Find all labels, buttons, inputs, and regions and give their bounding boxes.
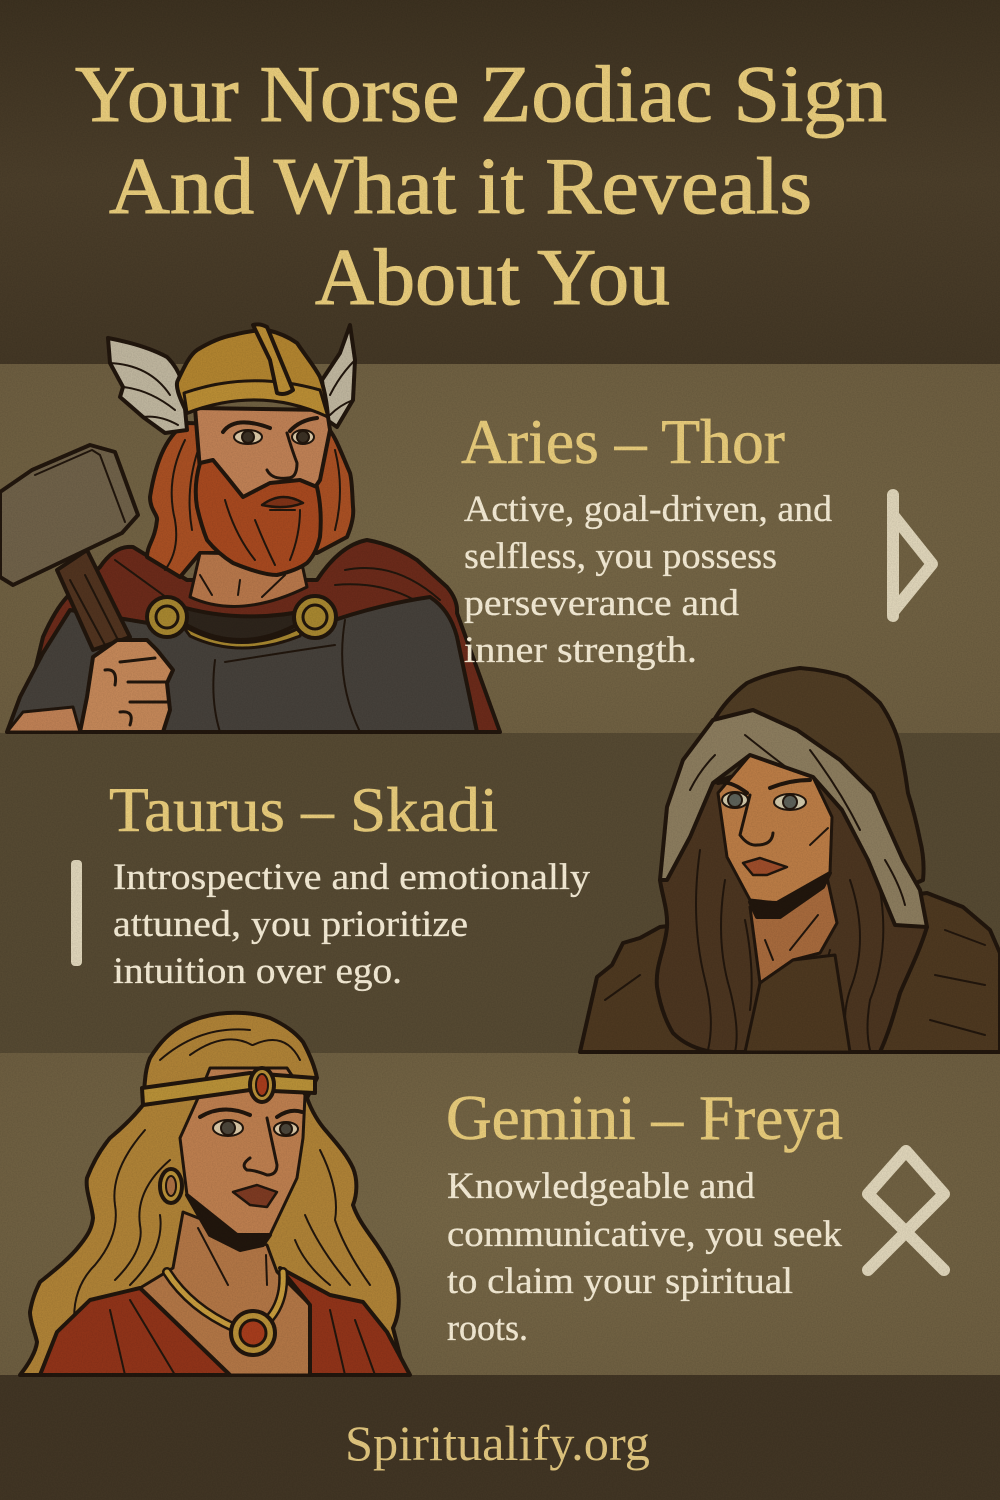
icon: Othala rune <box>868 1151 944 1270</box>
band: Taurus background <box>0 733 1000 1053</box>
Skadi hair <box>657 760 927 1052</box>
Thor beard <box>196 460 321 575</box>
text: Taurus description: attuned, you prioritize <box>113 904 468 945</box>
header band <box>0 0 1000 364</box>
illustration: Freya <box>20 1013 410 1375</box>
Thor helmet dome <box>177 330 328 417</box>
Freya skin chest <box>140 1212 310 1375</box>
Freya nose <box>244 1118 277 1175</box>
heading: Taurus: Taurus – Skadi <box>109 774 498 845</box>
Thor left wing <box>108 338 187 433</box>
Thor torso <box>7 597 477 732</box>
title: About You <box>315 234 670 322</box>
Thor brooch right <box>294 596 336 638</box>
Skadi fur trim <box>660 710 927 927</box>
Thor eyes <box>234 430 314 444</box>
title <box>75 51 887 322</box>
Thor nose <box>267 433 297 478</box>
band: Gemini background <box>0 1053 1000 1375</box>
Skadi nose <box>740 795 773 845</box>
Freya mouth <box>233 1185 277 1207</box>
title: And What it Reveals <box>109 143 812 231</box>
Freya brows <box>200 1109 302 1117</box>
icon: Thurisaz rune <box>893 495 932 616</box>
Skadi brows <box>718 780 810 793</box>
Skadi collar fur <box>745 955 850 1052</box>
Thor hair <box>147 423 353 577</box>
text: Aries description: selfless, you possess <box>464 536 777 577</box>
Skadi fur cloak <box>580 893 1000 1052</box>
text: Taurus description: intuition over ego. <box>113 951 402 992</box>
Skadi eyes <box>722 792 806 810</box>
Freya headband <box>142 1073 315 1105</box>
Thor neck <box>190 553 307 606</box>
footer band <box>0 1375 1000 1500</box>
Skadi neck <box>750 877 837 983</box>
icon: Isa rune <box>71 860 82 966</box>
text: Taurus description: Introspective and emotionally <box>113 857 591 898</box>
text: Aries description: inner strength. <box>464 630 697 671</box>
Thor forearm <box>7 707 80 732</box>
illustration: Thor <box>0 324 500 732</box>
Thor helmet ridge <box>253 324 293 394</box>
heading: Aries: Aries – Thor <box>461 406 785 477</box>
text: Gemini description: roots. <box>447 1308 528 1349</box>
Freya dress <box>40 1268 410 1375</box>
Thor hammer head <box>0 445 138 585</box>
Freya hair <box>20 1013 405 1375</box>
Thor cape <box>20 540 500 732</box>
Thor hammer handle <box>57 550 130 650</box>
Freya headband jewel <box>250 1068 274 1102</box>
Thor fist <box>80 640 173 732</box>
text: Gemini description <box>447 1166 843 1349</box>
text: Aries description <box>464 489 833 671</box>
Freya necklace <box>167 1272 283 1328</box>
Skadi face <box>718 755 832 903</box>
Thor face <box>195 408 330 510</box>
Thor right wing <box>322 325 355 427</box>
Thor collar <box>175 605 310 640</box>
title: Your Norse Zodiac Sign <box>75 51 887 139</box>
Freya eyes <box>213 1120 298 1136</box>
Thor brooch left <box>147 597 187 637</box>
Freya face <box>180 1068 305 1235</box>
heading: Gemini: Gemini – Freya <box>446 1082 843 1153</box>
band: Aries background <box>0 364 1000 733</box>
text: Gemini description: to claim your spiritual <box>447 1261 793 1302</box>
text: Taurus description <box>113 857 591 992</box>
illustration: Skadi <box>580 668 1000 1052</box>
Freya earring <box>160 1169 182 1203</box>
text: Aries description: perseverance and <box>464 583 740 624</box>
text: Aries description: Active, goal-driven, and <box>464 489 833 530</box>
Skadi mouth <box>743 858 787 875</box>
Skadi hood <box>713 668 924 890</box>
footer text: Spiritualify.org <box>345 1415 650 1471</box>
Skadi chin shadow <box>750 873 830 917</box>
text: Gemini description: communicative, you seek <box>447 1214 843 1255</box>
Thor brows <box>223 418 317 432</box>
Freya chin shadow <box>187 1195 270 1250</box>
text: Gemini description: Knowledgeable and <box>447 1166 756 1207</box>
Freya pendant <box>231 1311 275 1355</box>
